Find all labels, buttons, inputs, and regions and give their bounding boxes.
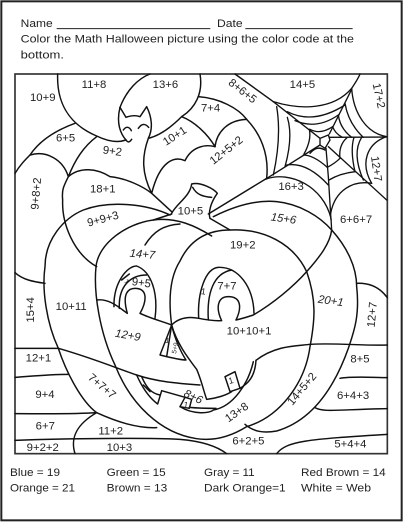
math problem labels: 9+5 bbox=[131, 276, 152, 291]
math problem labels: 12+7 bbox=[368, 155, 383, 182]
color key legend: White = Web bbox=[301, 483, 371, 495]
math problem labels: 10+9 bbox=[30, 92, 56, 104]
math problem labels: 9+4 bbox=[35, 389, 55, 401]
jack-o-lantern eyes bbox=[97, 230, 332, 325]
math problem labels: 5+9 bbox=[171, 342, 180, 354]
color key legend bbox=[10, 467, 386, 495]
color key legend: Orange = 21 bbox=[10, 483, 75, 495]
math problem labels: 18+1 bbox=[90, 184, 116, 196]
math problem labels: 1 bbox=[200, 286, 207, 297]
math problem labels: 9+9+3 bbox=[86, 210, 120, 230]
math problem labels: 12+1 bbox=[26, 353, 51, 365]
math problem labels: 10+3 bbox=[107, 442, 132, 454]
header: name and date bbox=[21, 18, 353, 30]
lower bands bbox=[15, 273, 387, 454]
math problem labels: 6+7 bbox=[36, 421, 55, 433]
math problem labels: 12+5+2 bbox=[208, 134, 245, 167]
math problem labels: 19+2 bbox=[230, 239, 256, 251]
math problem labels: 8+6 bbox=[182, 388, 205, 407]
header: name and date: Date bbox=[217, 18, 243, 30]
math problem labels: 17+2 bbox=[370, 82, 387, 110]
math problem labels: 10+11 bbox=[56, 301, 87, 313]
math problem labels: 11+2 bbox=[98, 425, 123, 437]
math problem labels: 14+5 bbox=[290, 79, 315, 91]
math problem labels: 6+4+3 bbox=[337, 390, 369, 402]
math problem labels: 10+1 bbox=[161, 125, 189, 149]
math problem labels: 1 bbox=[183, 399, 189, 410]
instructions bbox=[21, 34, 354, 62]
math problem labels: 5+4+4 bbox=[334, 439, 366, 451]
math problem labels: 13+6 bbox=[153, 79, 178, 91]
math problem labels bbox=[25, 77, 387, 454]
background regions, upper left bbox=[15, 123, 172, 267]
math problem labels: 11+8 bbox=[82, 79, 106, 91]
math problem labels: 1 bbox=[227, 375, 235, 386]
math problem labels: 16+3 bbox=[278, 181, 304, 193]
header: name and date: Name bbox=[21, 18, 53, 30]
math problem labels: 1 bbox=[123, 278, 130, 286]
math problem labels: 13+8 bbox=[223, 401, 251, 425]
color key legend: Gray = 11 bbox=[204, 467, 255, 479]
math problem labels: 7+7+7 bbox=[85, 372, 118, 402]
math problem labels: 6+5 bbox=[56, 133, 75, 145]
pumpkin stem bbox=[172, 178, 267, 230]
math problem labels: 6+6+7 bbox=[340, 214, 372, 226]
math problem labels: 7+4 bbox=[201, 102, 220, 114]
color key legend: Blue = 19 bbox=[10, 467, 60, 479]
color key legend: Red Brown = 14 bbox=[301, 467, 386, 479]
moon and bat bbox=[58, 74, 273, 193]
instructions: bottom. bbox=[21, 50, 64, 62]
jack-o-lantern nose bbox=[160, 325, 186, 360]
line art: Halloween pumpkin, bat, moon and web bbox=[15, 74, 387, 454]
math problem labels: 15+6 bbox=[270, 211, 298, 227]
instructions: Color the Math Halloween picture using the color code at the bbox=[21, 34, 354, 46]
math problem labels: 14+7 bbox=[129, 248, 156, 262]
math problem labels: 9+2+2 bbox=[27, 442, 59, 454]
jack-o-lantern mouth bbox=[58, 325, 387, 413]
math problem labels: 8+6+5 bbox=[226, 77, 259, 106]
math problem labels: 20+1 bbox=[316, 294, 344, 309]
math problem labels: 8+5 bbox=[350, 354, 370, 366]
spider web bbox=[265, 74, 387, 230]
pumpkin lobes bbox=[44, 201, 358, 439]
math problem labels: 12+9 bbox=[114, 328, 142, 344]
math problem labels: 15+4 bbox=[25, 297, 37, 323]
math problem labels: 12+7 bbox=[366, 301, 380, 328]
math problem labels: 6+2+5 bbox=[232, 436, 264, 448]
picture frame bbox=[15, 74, 387, 454]
math problem labels: 1 bbox=[165, 336, 170, 345]
math problem labels: 9+8+2 bbox=[29, 177, 44, 210]
math problem labels: 10+10+1 bbox=[227, 325, 271, 337]
math problem labels: 14+5+2 bbox=[285, 371, 319, 408]
math problem labels: 7+7 bbox=[217, 280, 237, 292]
color key legend: Green = 15 bbox=[107, 467, 166, 479]
math problem labels: 9+2 bbox=[102, 144, 123, 159]
color key legend: Brown = 13 bbox=[107, 483, 167, 495]
color key legend: Dark Orange=1 bbox=[204, 483, 286, 495]
math problem labels: 10+5 bbox=[178, 205, 203, 217]
